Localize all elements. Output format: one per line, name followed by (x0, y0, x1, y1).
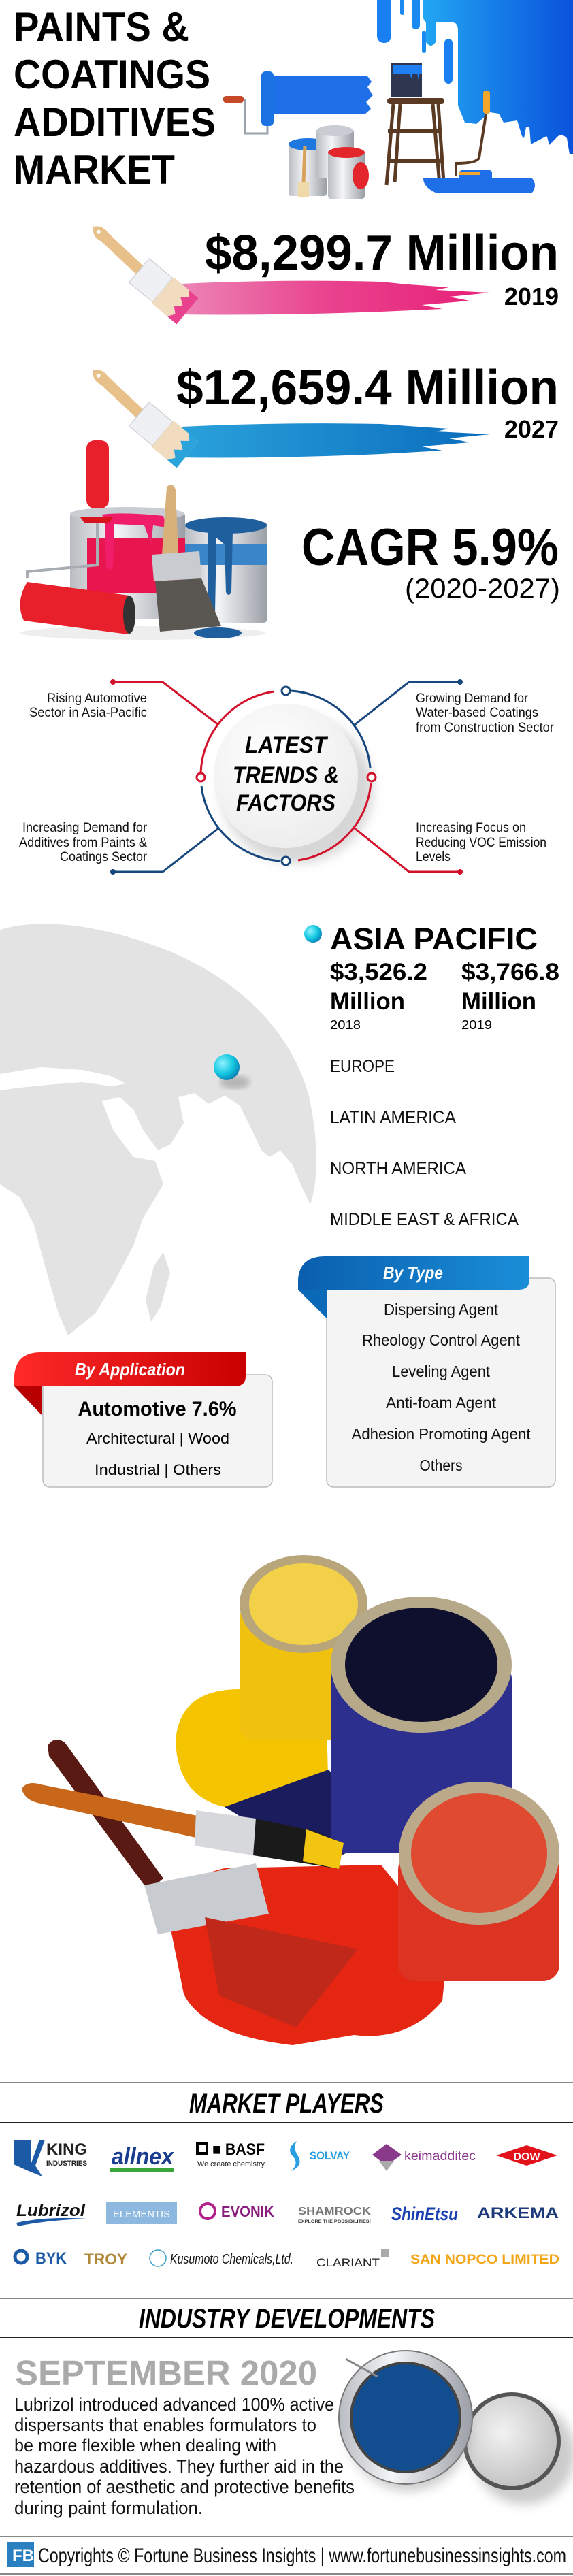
map: world globe (0, 924, 316, 1335)
logo row 3: SAN NOPCO LIMITED (410, 2253, 559, 2267)
heading: industry developments: INDUSTRY DEVELOPMENTS (139, 2304, 435, 2334)
logo row 2: ShinEtsu (391, 2204, 458, 2224)
logo row 3 (15, 2249, 559, 2269)
text block: september 2020 development: during paint formulation. (14, 2498, 203, 2518)
logo row 1: ■ BASF (212, 2140, 265, 2159)
trend: additives demand: Increasing Demand for (22, 821, 148, 835)
logos: market players (14, 2140, 559, 2269)
trend: rising automotive: Rising Automotive (47, 691, 147, 706)
stat: 2019 market value with pink brush stroke: $8,299.7 Million (205, 226, 559, 280)
region: asia pacific: $3,526.2 (330, 959, 427, 985)
hero illustration: blue paint splash, roller, stool, cans (223, 0, 573, 199)
icon: open blue paint can (339, 2351, 573, 2505)
title: ADDITIVES (14, 99, 216, 145)
illustration: paint cans, roller and brush (20, 440, 267, 640)
panel: by type: Anti-foam Agent (386, 1394, 497, 1412)
center disc (214, 704, 358, 848)
trend: rising automotive: Sector in Asia-Pacific (29, 706, 147, 720)
logo row 2: EXPLORE THE POSSIBILITIES! (298, 2220, 371, 2224)
banner: by application (14, 1352, 246, 1386)
region: asia pacific: 2019 (461, 1018, 492, 1032)
illustration: paint cans photo (22, 1555, 559, 2045)
panel: by type (298, 1256, 555, 1487)
stat: 2019 market value with pink brush stroke: 2019 (504, 282, 559, 310)
logo row 2: EVONIK (221, 2203, 274, 2220)
panel: by application: Automotive 7.6% (78, 1398, 237, 1420)
stat: CAGR (301, 519, 560, 604)
region list: LATIN AMERICA (330, 1108, 456, 1127)
banner: by application: By Application (75, 1359, 185, 1380)
text block: september 2020 development: dispersants that enables formulators to (14, 2415, 316, 2435)
footer: FB (12, 2547, 34, 2565)
trend: additives demand: Additives from Paints & (19, 836, 147, 850)
text block: september 2020 development: SEPTEMBER 2020 (15, 2353, 317, 2392)
trend: water-based coatings (416, 691, 555, 735)
trend: water-based coatings: from Construction Sector (416, 721, 555, 735)
text block: september 2020 development: be more flexible when dealing with (14, 2435, 276, 2456)
panel: by application (14, 1352, 272, 1487)
text block: september 2020 development: Lubrizol introduced advanced 100% active (14, 2394, 334, 2415)
stat: 2027 market value with blue brush stroke: $12,659.4 Million (176, 361, 559, 415)
panel: by application: Industrial | Others (95, 1461, 221, 1478)
logo row 2: ELEMENTIS (113, 2208, 170, 2220)
title (14, 4, 216, 193)
stat: CAGR: (2020-2027) (405, 574, 560, 604)
banner: by type: By Type (383, 1262, 443, 1283)
center disc: LATEST (245, 732, 329, 758)
footer (0, 2536, 573, 2575)
region list: MIDDLE EAST & AFRICA (330, 1210, 519, 1229)
region: asia pacific: Million (330, 988, 405, 1015)
region: asia pacific: $3,766.8 (461, 959, 559, 985)
stat: 2027 market value with blue brush stroke (80, 360, 559, 468)
logo row 2: ARKEMA (477, 2204, 559, 2221)
title: COATINGS (14, 52, 210, 97)
stat: 2019 market value with pink brush stroke (80, 216, 559, 324)
logo row 1: INDUSTRIES (46, 2159, 87, 2168)
region: asia pacific: 2018 (330, 1018, 361, 1032)
trend: VOC emission (416, 821, 546, 864)
region list: EUROPE (330, 1057, 395, 1076)
logo row 2 (16, 2202, 559, 2226)
region: asia pacific: Million (461, 988, 536, 1015)
logo row 1: allnex (112, 2144, 175, 2170)
logo row 3: TROY (84, 2251, 127, 2268)
region: asia pacific: ASIA PACIFIC (330, 922, 538, 956)
logo row 1: We create chemistry (197, 2160, 265, 2168)
region list (330, 1057, 519, 1229)
text block: september 2020 development (14, 2353, 355, 2518)
icon: map pin (214, 1054, 250, 1089)
panel: latest trends & factors (110, 679, 463, 875)
text block: september 2020 development: retention of aesthetic and protective benefits (14, 2477, 355, 2497)
region: asia pacific (304, 922, 559, 1032)
title: MARKET (14, 147, 175, 193)
heading: market players: MARKET PLAYERS (189, 2089, 384, 2119)
logo row 1: KING (46, 2140, 87, 2159)
trend: VOC emission: Levels (416, 850, 451, 864)
logo row 1 (14, 2140, 557, 2176)
text block: september 2020 development: hazardous additives. They further aid in the (14, 2456, 344, 2477)
logo row 3: BYK (35, 2249, 67, 2268)
title: PAINTS & (14, 4, 189, 50)
logo row 3: Kusumoto Chemicals,Ltd. (170, 2252, 293, 2267)
logo row 2: Lubrizol (16, 2202, 86, 2220)
panel: by type: Rheology Control Agent (362, 1331, 521, 1349)
logo row 1: DOW (513, 2151, 540, 2163)
trend: additives demand: Coatings Sector (60, 850, 148, 864)
logo row 3: CLARIANT (316, 2256, 380, 2269)
logo row 1: SOLVAY (310, 2149, 350, 2162)
trend: VOC emission: Increasing Focus on (416, 821, 526, 835)
banner: by type (298, 1256, 529, 1290)
trend: additives demand (19, 821, 148, 864)
panel: by type: Adhesion Promoting Agent (351, 1425, 531, 1443)
panel: by type: Others (419, 1456, 463, 1474)
panel: by type: Dispersing Agent (384, 1301, 499, 1318)
trend: rising automotive (29, 691, 147, 720)
center disc: TRENDS & (233, 762, 339, 788)
logo row 1: keimadditec (404, 2149, 476, 2164)
trend: VOC emission: Reducing VOC Emission (416, 836, 546, 850)
panel: by application: Architectural | Wood (86, 1430, 229, 1447)
stat: 2027 market value with blue brush stroke: 2027 (504, 415, 559, 443)
center disc: FACTORS (236, 790, 335, 816)
logo row 2: SHAMROCK (298, 2206, 372, 2217)
region list: NORTH AMERICA (330, 1159, 466, 1178)
trend: water-based coatings: Growing Demand for (416, 691, 529, 706)
trend: water-based coatings: Water-based Coatings (416, 706, 538, 720)
panel: by type: Leveling Agent (392, 1363, 491, 1380)
